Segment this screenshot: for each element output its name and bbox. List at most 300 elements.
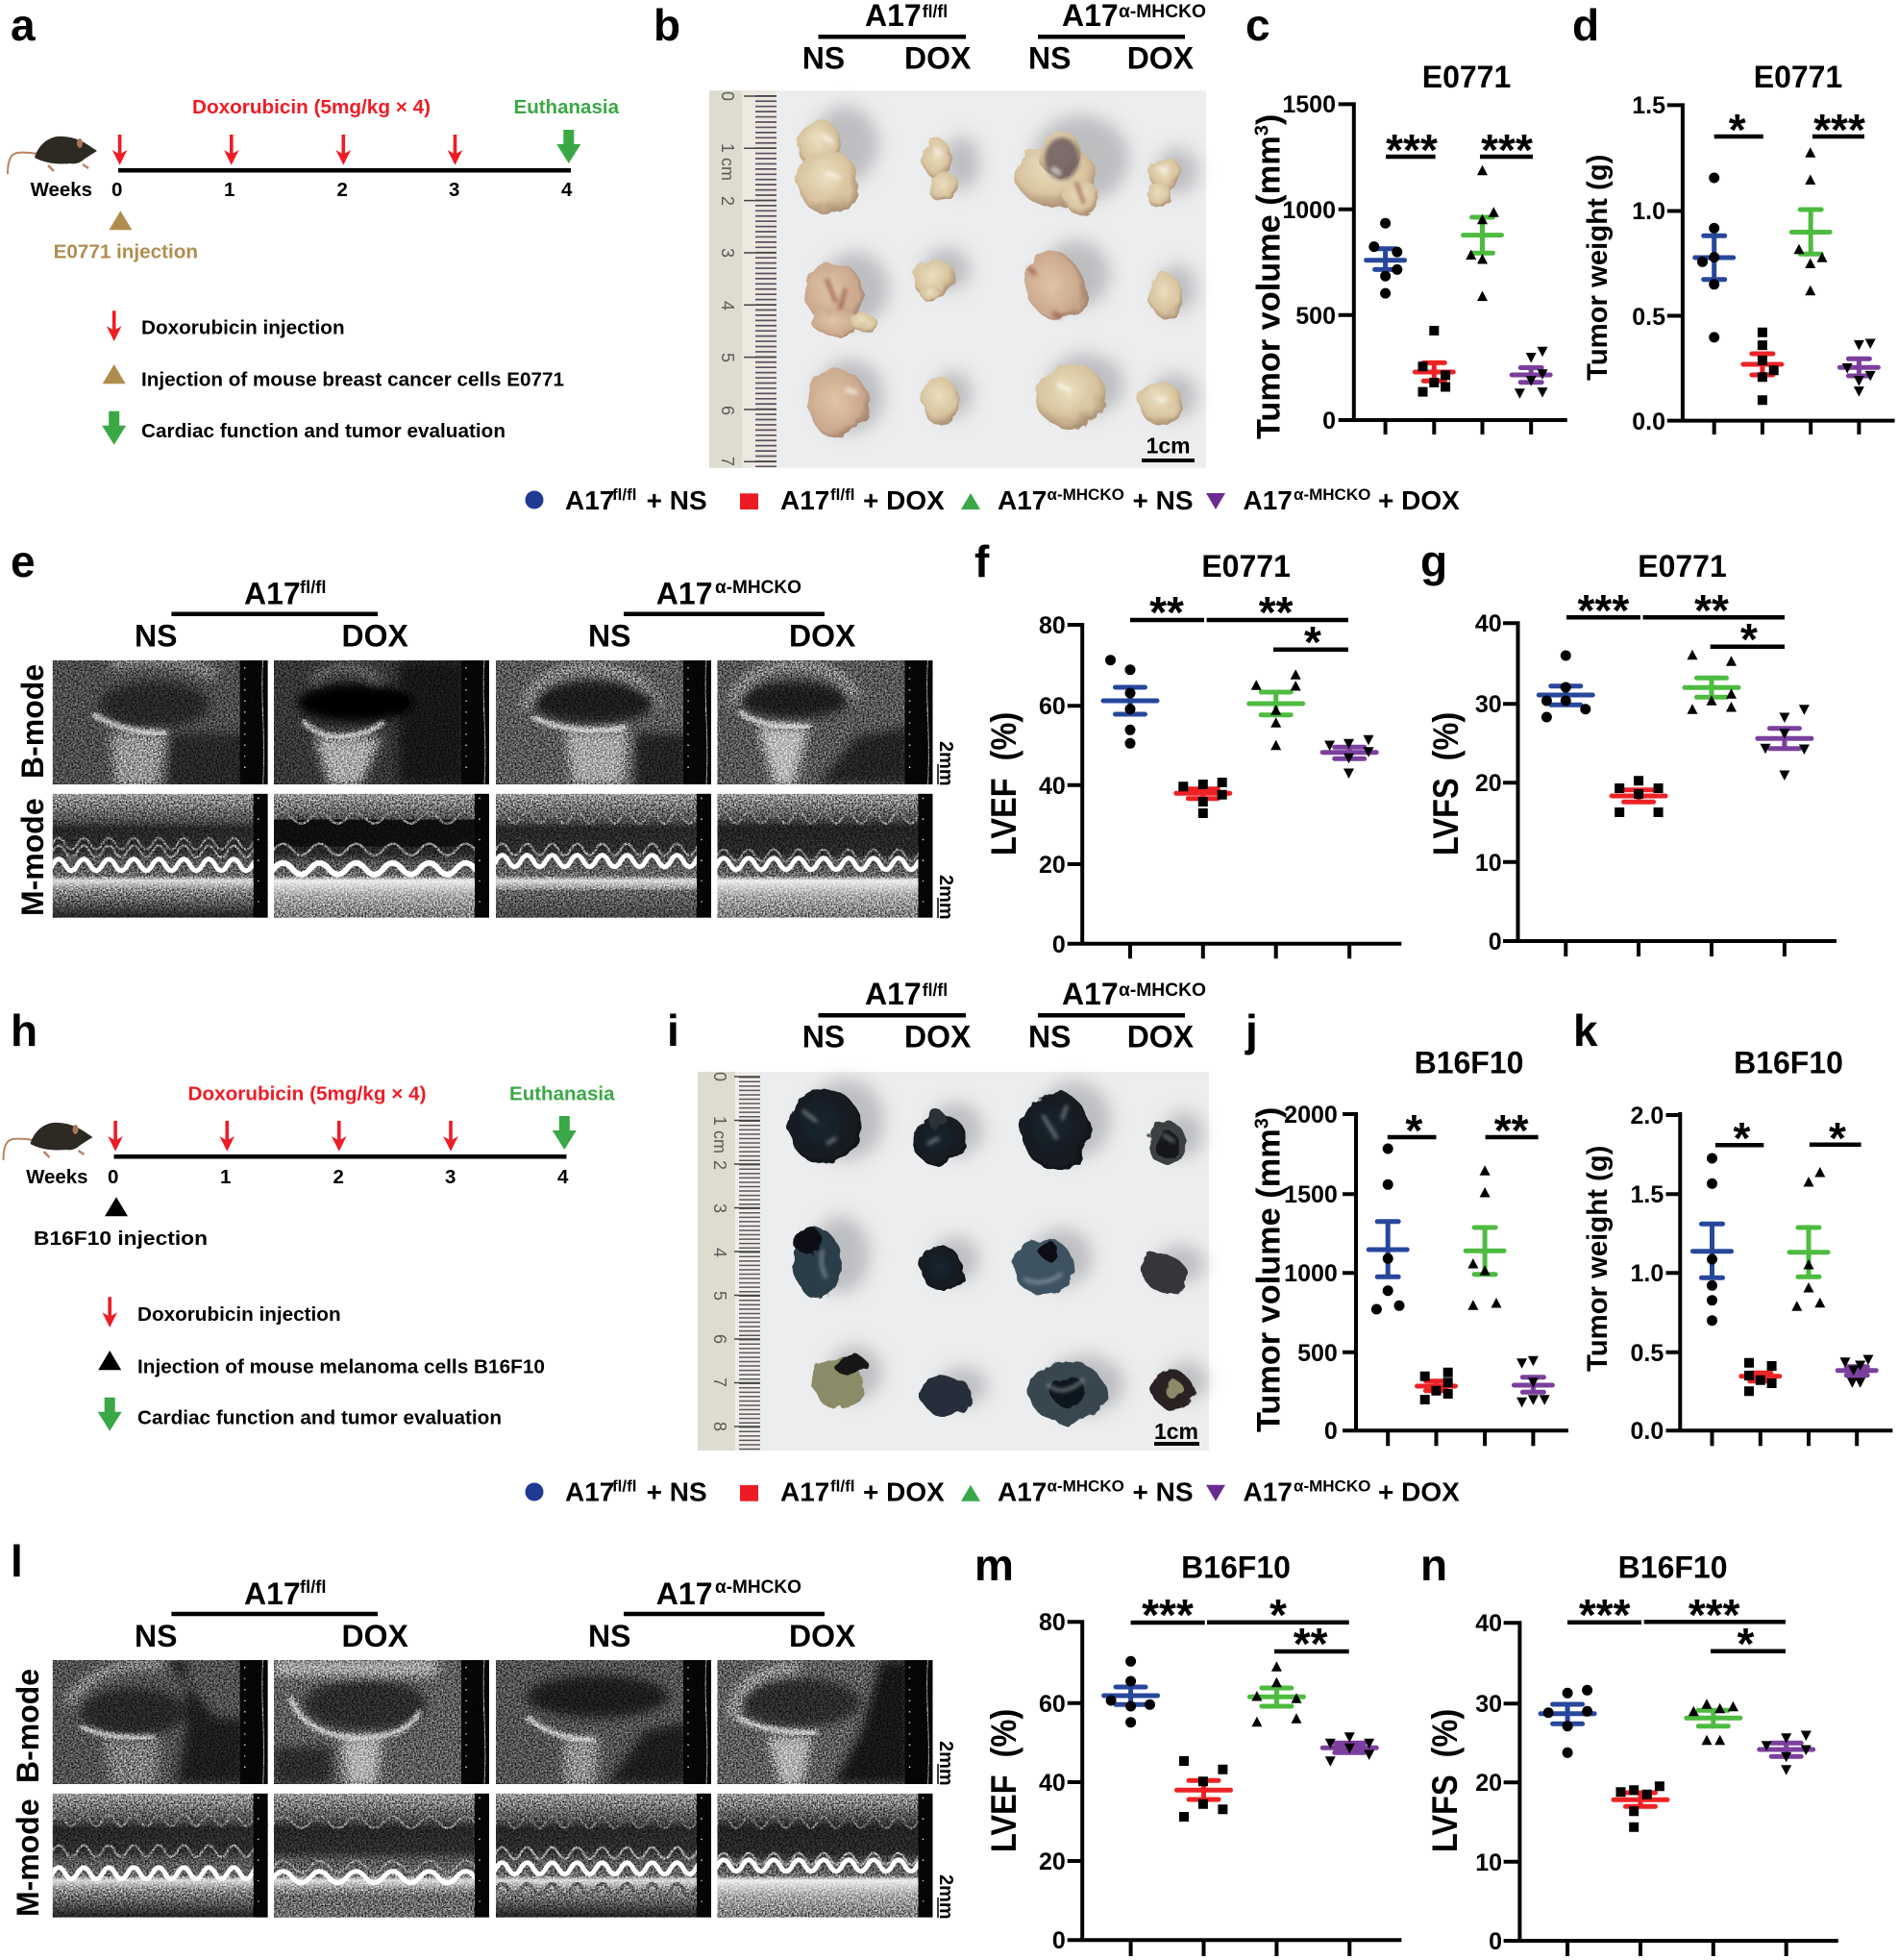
M-mode NS knockout xyxy=(496,794,711,918)
B-mode NS xyxy=(52,1660,268,1784)
data points xyxy=(1111,660,1374,813)
legend: A17fl/fl + NS xyxy=(525,1477,707,1507)
tick labels: 0 xyxy=(1489,1928,1502,1955)
scale labels 2mm xyxy=(935,1741,956,1920)
axes xyxy=(1666,1112,1892,1446)
significance bars: *** xyxy=(1579,1590,1631,1640)
significance bars: *** xyxy=(1142,1590,1194,1640)
significance bars xyxy=(1388,1105,1539,1155)
panel e: echo images E0771 xyxy=(11,536,956,920)
tumors xyxy=(798,119,1183,438)
group headers: DOX xyxy=(789,619,856,654)
panel letter n: n xyxy=(1420,1540,1447,1590)
ruler: 3 xyxy=(718,248,737,258)
panel j: tumor volume chart xyxy=(1245,1005,1568,1446)
significance bars: *** xyxy=(1481,125,1533,175)
M-mode DOX xyxy=(274,1794,489,1918)
ruler: 0 xyxy=(710,1072,729,1081)
group headers: DOX xyxy=(1127,41,1195,76)
group headers: fl/fl xyxy=(300,578,327,597)
row labels: B-mode xyxy=(11,1669,45,1783)
mean and SEM bars xyxy=(1103,687,1376,799)
tick labels xyxy=(1039,1609,1066,1954)
panel letter k: k xyxy=(1573,1005,1598,1055)
data points xyxy=(1713,1158,1874,1391)
data points xyxy=(1376,1149,1550,1407)
mean and SEM bars xyxy=(1541,1704,1813,1806)
tick labels: 1500 xyxy=(1282,91,1336,118)
tick labels: 60 xyxy=(1039,693,1066,720)
group headers: DOX xyxy=(789,1619,856,1653)
significance bars: *** xyxy=(1386,125,1438,175)
legend: timeline key: Injection of mouse breast cancer cells E0771 xyxy=(141,369,564,391)
tumor shadows xyxy=(813,106,1198,433)
red dosing arrows xyxy=(108,1121,458,1152)
tumor surface detail xyxy=(822,135,1168,401)
ruler: 6 xyxy=(718,406,737,415)
ruler: 5 xyxy=(710,1291,729,1301)
group headers: A17 xyxy=(1062,977,1119,1011)
group headers: A17 xyxy=(656,576,713,610)
tick labels: 500 xyxy=(1297,1340,1338,1367)
M-mode DOX knockout xyxy=(717,794,932,918)
ruler: 3 xyxy=(710,1203,729,1213)
doxorubicin label: Doxorubicin (5mg/kg × 4) xyxy=(192,96,431,118)
tick labels: 1.0 xyxy=(1632,198,1665,225)
legend: A17fl/fl + DOX: + DOX xyxy=(863,485,945,515)
chart title: B16F10 xyxy=(1181,1551,1291,1585)
group headers xyxy=(802,0,1206,76)
group headers xyxy=(802,977,1206,1054)
significance bars: ** xyxy=(1694,585,1729,635)
data points xyxy=(1111,1661,1374,1817)
ruler: 7 xyxy=(718,457,737,466)
week labels xyxy=(31,179,573,201)
mean and SEM bars xyxy=(1539,678,1812,802)
week labels: 3 xyxy=(445,1166,456,1188)
axes xyxy=(1068,623,1401,958)
tick labels xyxy=(1039,612,1066,958)
y axis label: 3 xyxy=(1251,1118,1272,1129)
scale labels 2mm xyxy=(935,741,956,920)
ruler: 1 cm xyxy=(718,143,737,181)
tick labels: 40 xyxy=(1039,1770,1066,1797)
E0771 injection label: E0771 injection xyxy=(54,240,198,262)
ruler: 8 xyxy=(710,1422,729,1431)
chart title: B16F10 xyxy=(1618,1551,1728,1585)
group headers: NS xyxy=(588,619,630,654)
ruler: 2 xyxy=(718,196,737,206)
tick labels: 0 xyxy=(1322,408,1336,434)
y axis label: ) xyxy=(1251,114,1288,125)
tick labels: 40 xyxy=(1475,610,1502,637)
y axis label: Tumor weight (g) xyxy=(1582,155,1614,381)
legend: A17fl/fl + DOX: A17 xyxy=(780,485,829,515)
y axis label: LVEF (%) xyxy=(984,712,1024,856)
week labels: 4 xyxy=(557,1166,569,1188)
tick labels: 0 xyxy=(1052,1927,1066,1954)
data points xyxy=(1546,650,1810,812)
mean and SEM bars xyxy=(1104,1687,1376,1799)
legend: A17a-MHCKO + DOX: A17 xyxy=(1244,485,1293,515)
significance bars: ** xyxy=(1294,1619,1328,1669)
tick labels: 0.0 xyxy=(1631,1418,1664,1445)
data points xyxy=(1374,165,1547,399)
legend: timeline key: Doxorubicin injection xyxy=(137,1303,341,1326)
panel letter a: a xyxy=(11,0,36,50)
legend: A17fl/fl + NS: A17 xyxy=(565,1477,614,1507)
B-mode DOX xyxy=(274,1660,489,1784)
significance bars: *** xyxy=(1688,1590,1740,1640)
group headers: A17 xyxy=(244,1576,301,1611)
mean and SEM bars xyxy=(1368,1222,1552,1392)
significance bars xyxy=(1386,125,1533,175)
group headers xyxy=(135,576,856,654)
y axis label: Tumor volume (mm xyxy=(1251,136,1288,439)
chart title: B16F10 xyxy=(1734,1046,1843,1080)
data points xyxy=(1703,147,1876,400)
legend: A17fl/fl + NS xyxy=(525,485,707,515)
icon: B16F10 injection triangle xyxy=(105,1197,128,1216)
legend: A17a-MHCKO + NS: α-MHCKO xyxy=(1048,485,1124,504)
significance bars: * xyxy=(1269,1590,1287,1640)
panel n: LVFS chart xyxy=(1420,1540,1838,1956)
significance bars xyxy=(1131,1590,1349,1669)
group headers: NS xyxy=(135,619,177,654)
week labels: 0 xyxy=(108,1166,118,1188)
group headers: NS xyxy=(1028,41,1071,76)
tick labels: 1500 xyxy=(1284,1181,1338,1208)
legend: A17fl/fl + NS: + NS xyxy=(647,485,707,515)
significance bars: * xyxy=(1740,614,1758,664)
group headers: NS xyxy=(135,1619,177,1653)
panel f: LVEF chart xyxy=(974,536,1401,958)
B-mode NS xyxy=(52,660,268,784)
week labels: 0 xyxy=(111,179,122,201)
panel a: E0771 timeline xyxy=(8,0,620,445)
group headers: fl/fl xyxy=(923,980,948,1000)
legend: A17a-MHCKO + NS: + NS xyxy=(1132,1477,1194,1507)
group headers: DOX xyxy=(1127,1020,1195,1054)
ruler xyxy=(698,1072,760,1451)
group headers: α-MHCKO xyxy=(1119,980,1206,1001)
week labels: 3 xyxy=(449,179,459,201)
row labels: M-mode xyxy=(15,798,50,916)
icon: euthanasia arrow xyxy=(556,130,580,163)
group headers: fl/fl xyxy=(300,1577,327,1597)
group headers: DOX xyxy=(342,619,409,654)
week labels: 2 xyxy=(333,1166,344,1188)
row labels: B-mode xyxy=(15,664,50,779)
tick labels: 0.0 xyxy=(1632,409,1665,435)
tick labels: 2000 xyxy=(1284,1102,1338,1129)
M-mode NS knockout xyxy=(496,1794,711,1918)
B-mode NS knockout xyxy=(496,1660,711,1784)
tick labels: 30 xyxy=(1475,691,1502,718)
significance bars: ** xyxy=(1149,587,1184,637)
significance bars: ** xyxy=(1494,1105,1529,1155)
legend: A17a-MHCKO + NS xyxy=(961,485,1194,515)
significance bars: * xyxy=(1734,1113,1751,1163)
group headers: α-MHCKO xyxy=(1119,1,1206,22)
legend: A17fl/fl + NS: A17 xyxy=(565,485,614,515)
panel d: tumor weight chart xyxy=(1572,0,1895,435)
mean and SEM bars xyxy=(1693,1224,1876,1381)
group headers: DOX xyxy=(904,41,972,76)
tick labels: 80 xyxy=(1039,1609,1066,1636)
axes xyxy=(1343,1112,1568,1446)
chart title: E0771 xyxy=(1638,549,1727,583)
legend row 2 xyxy=(525,1477,1460,1507)
tick labels: 500 xyxy=(1295,303,1336,330)
legend: A17fl/fl + DOX xyxy=(740,1477,945,1507)
week labels: 2 xyxy=(336,179,348,201)
y axis label: LVFS (%) xyxy=(1425,1709,1466,1852)
icon: mouse xyxy=(8,136,97,174)
y axis label: Tumor volume (mm xyxy=(1251,1129,1288,1432)
tick labels xyxy=(1475,1610,1502,1955)
euthanasia label: Euthanasia xyxy=(509,1082,615,1105)
tick labels: 20 xyxy=(1475,1770,1502,1797)
group headers: NS xyxy=(802,1020,845,1054)
tick labels xyxy=(1282,91,1336,434)
panel letter b: b xyxy=(653,0,680,50)
scale labels 2mm: 2mm xyxy=(935,1874,956,1920)
M-mode DOX xyxy=(274,794,489,918)
y axis label: ) xyxy=(1251,1107,1288,1118)
significance bars: * xyxy=(1304,617,1321,667)
group headers: DOX xyxy=(342,1619,409,1653)
legend: A17a-MHCKO + DOX: α-MHCKO xyxy=(1294,485,1370,504)
data points xyxy=(1548,1690,1812,1827)
panel c: tumor volume chart xyxy=(1245,0,1567,439)
legend: A17a-MHCKO + DOX xyxy=(1206,485,1460,515)
tumors xyxy=(789,1088,1201,1423)
icon: mouse xyxy=(4,1123,92,1160)
legend: A17a-MHCKO + DOX: + DOX xyxy=(1378,485,1460,515)
panel h: B16F10 timeline xyxy=(4,1005,615,1431)
significance bars: * xyxy=(1829,1113,1846,1163)
axes xyxy=(1339,102,1567,434)
B-mode DOX knockout xyxy=(717,1660,932,1784)
legend: A17a-MHCKO + NS: α-MHCKO xyxy=(1048,1477,1124,1496)
week labels: 1 xyxy=(220,1166,231,1188)
tick labels: 40 xyxy=(1039,773,1066,800)
axes xyxy=(1068,1620,1401,1956)
mean and SEM bars xyxy=(1367,217,1550,383)
week labels: 4 xyxy=(561,179,573,201)
ruler: 5 xyxy=(718,353,737,362)
week labels xyxy=(26,1166,569,1188)
tick labels: 0.5 xyxy=(1631,1340,1664,1367)
tick labels xyxy=(1284,1102,1338,1445)
ruler xyxy=(709,90,776,468)
legend: timeline key: Cardiac function and tumor evaluation xyxy=(137,1407,502,1429)
legend: A17a-MHCKO + NS: A17 xyxy=(998,1477,1047,1507)
panel i: B16F10 tumor photo xyxy=(667,977,1209,1451)
tick labels: 60 xyxy=(1039,1691,1066,1718)
panel letter e: e xyxy=(11,536,36,586)
tick labels: 0 xyxy=(1324,1418,1338,1445)
ruler: 0 xyxy=(718,91,737,101)
legend: timeline key: Cardiac function and tumor evaluation xyxy=(141,420,505,442)
legend: A17fl/fl + NS: + NS xyxy=(647,1477,707,1507)
tick labels: 2.0 xyxy=(1631,1103,1664,1129)
red dosing arrows xyxy=(112,135,462,165)
tumor shadows xyxy=(807,1079,1208,1413)
significance bars xyxy=(1567,1590,1786,1669)
tick labels: 20 xyxy=(1475,770,1502,797)
doxorubicin label: Doxorubicin (5mg/kg × 4) xyxy=(188,1082,427,1105)
scale labels 2mm: 2mm xyxy=(935,741,956,786)
group headers: α-MHCKO xyxy=(715,1577,801,1598)
panel letter g: g xyxy=(1420,536,1447,586)
timeline axis xyxy=(118,168,571,173)
photo background xyxy=(709,90,1206,468)
tick labels: 40 xyxy=(1475,1610,1502,1637)
tick labels: 20 xyxy=(1039,1848,1066,1875)
tick labels: 0 xyxy=(1489,929,1502,955)
tick labels: 1.5 xyxy=(1632,92,1665,119)
tick labels: 1.5 xyxy=(1631,1181,1664,1208)
legend: A17a-MHCKO + DOX: A17 xyxy=(1244,1477,1293,1507)
panel k: tumor weight chart xyxy=(1573,1005,1892,1446)
legend: A17fl/fl + DOX: fl/fl xyxy=(830,485,855,504)
ruler: 1 cm xyxy=(710,1116,729,1154)
panel letter l: l xyxy=(11,1536,23,1586)
legend: A17fl/fl + DOX: + DOX xyxy=(863,1477,945,1507)
chart title: B16F10 xyxy=(1415,1046,1523,1080)
tick labels: 10 xyxy=(1475,850,1502,877)
mean and SEM bars xyxy=(1695,210,1878,376)
chart title: E0771 xyxy=(1201,549,1291,583)
row labels xyxy=(11,1669,45,1917)
M-mode DOX knockout xyxy=(717,1794,932,1918)
significance bars: * xyxy=(1405,1105,1422,1155)
tick labels: 30 xyxy=(1475,1691,1502,1718)
M-mode NS xyxy=(52,794,268,918)
legend: timeline key xyxy=(98,1297,545,1431)
tick labels: 1000 xyxy=(1284,1260,1338,1287)
legend: timeline key: Injection of mouse melanoma cells B16F10 xyxy=(137,1355,545,1377)
tick labels: 10 xyxy=(1475,1849,1502,1876)
panel m: LVEF chart xyxy=(974,1540,1401,1956)
panel letter j: j xyxy=(1245,1005,1258,1055)
row labels xyxy=(15,664,50,916)
group headers: NS xyxy=(802,41,845,76)
week labels: Weeks xyxy=(31,179,92,201)
timeline axis xyxy=(113,1154,567,1159)
tick labels xyxy=(1632,92,1665,435)
panel letter c: c xyxy=(1245,0,1270,50)
legend: A17a-MHCKO + NS: + NS xyxy=(1132,485,1194,515)
legend: timeline key xyxy=(102,310,564,445)
scale labels 2mm: 2mm xyxy=(935,1741,956,1786)
tick labels: 1.0 xyxy=(1631,1260,1664,1287)
B16F10 injection label: B16F10 injection xyxy=(34,1228,208,1250)
icon: E0771 injection triangle xyxy=(109,211,132,230)
scale bar 1cm: 1cm xyxy=(1146,434,1191,459)
panel letter d: d xyxy=(1572,0,1599,50)
B-mode DOX xyxy=(274,660,489,784)
panel letter m: m xyxy=(974,1540,1014,1590)
legend: A17a-MHCKO + NS xyxy=(961,1477,1194,1507)
icon: euthanasia arrow xyxy=(553,1116,577,1150)
tick labels: 20 xyxy=(1039,852,1066,879)
legend row 1 xyxy=(525,485,1460,515)
tick labels: 80 xyxy=(1039,612,1066,639)
M-mode NS xyxy=(52,1794,268,1918)
tick labels xyxy=(1631,1103,1664,1445)
significance bars: ** xyxy=(1259,587,1294,637)
y axis label: Tumor weight (g) xyxy=(1582,1146,1614,1372)
significance bars xyxy=(1130,587,1348,667)
scale labels 2mm: 2mm xyxy=(935,875,956,920)
tick labels: 0.5 xyxy=(1632,304,1665,331)
y axis label: 3 xyxy=(1251,125,1272,136)
axes xyxy=(1667,103,1895,434)
panel b: E0771 tumor photo xyxy=(653,0,1206,468)
legend: A17a-MHCKO + NS: A17 xyxy=(998,485,1047,515)
ruler: 4 xyxy=(710,1248,729,1257)
panel l: echo images B16F10 xyxy=(11,1536,956,1920)
tick labels xyxy=(1475,610,1502,955)
legend: A17fl/fl + DOX xyxy=(740,485,945,515)
panel letter f: f xyxy=(974,536,990,586)
group headers: α-MHCKO xyxy=(715,578,801,598)
y axis label: LVFS (%) xyxy=(1426,712,1467,856)
ruler: 7 xyxy=(710,1377,729,1387)
row labels: M-mode xyxy=(11,1799,45,1917)
group headers: A17 xyxy=(244,576,301,610)
B-mode NS knockout xyxy=(496,660,711,784)
tick labels: 1000 xyxy=(1282,197,1336,224)
chart title: E0771 xyxy=(1422,60,1511,94)
legend: A17fl/fl + DOX: A17 xyxy=(780,1477,829,1507)
legend: A17fl/fl + DOX: fl/fl xyxy=(830,1477,855,1496)
significance bars: * xyxy=(1729,105,1746,155)
tumor surface detail xyxy=(802,1105,1174,1390)
panel letter i: i xyxy=(667,1005,679,1055)
legend: A17a-MHCKO + DOX: + DOX xyxy=(1378,1477,1460,1507)
significance bars: * xyxy=(1738,1619,1755,1669)
ruler: 4 xyxy=(718,301,737,310)
euthanasia label: Euthanasia xyxy=(513,96,620,118)
legend: A17a-MHCKO + DOX xyxy=(1206,1477,1460,1507)
B-mode DOX knockout xyxy=(717,660,932,784)
y axis label: LVEF (%) xyxy=(984,1709,1024,1852)
photo background xyxy=(698,1072,1209,1451)
tick labels: 0 xyxy=(1052,931,1066,958)
group headers: NS xyxy=(588,1619,630,1653)
ruler: 2 xyxy=(710,1160,729,1170)
group headers xyxy=(135,1576,856,1653)
scale bar 1cm: 1cm xyxy=(1154,1419,1198,1444)
group headers: A17 xyxy=(865,977,922,1011)
axes xyxy=(1503,621,1836,956)
legend: A17a-MHCKO + DOX: α-MHCKO xyxy=(1294,1477,1370,1496)
week labels: 1 xyxy=(224,179,234,201)
panel letter h: h xyxy=(11,1005,37,1055)
panel g: LVFS chart xyxy=(1420,536,1836,956)
group headers: DOX xyxy=(904,1020,972,1054)
significance bars: *** xyxy=(1813,105,1865,155)
legend: A17fl/fl + NS: fl/fl xyxy=(612,1477,636,1496)
ruler: 6 xyxy=(710,1334,729,1344)
group headers: fl/fl xyxy=(923,2,948,21)
axes xyxy=(1504,1621,1838,1956)
significance bars: *** xyxy=(1578,585,1629,635)
